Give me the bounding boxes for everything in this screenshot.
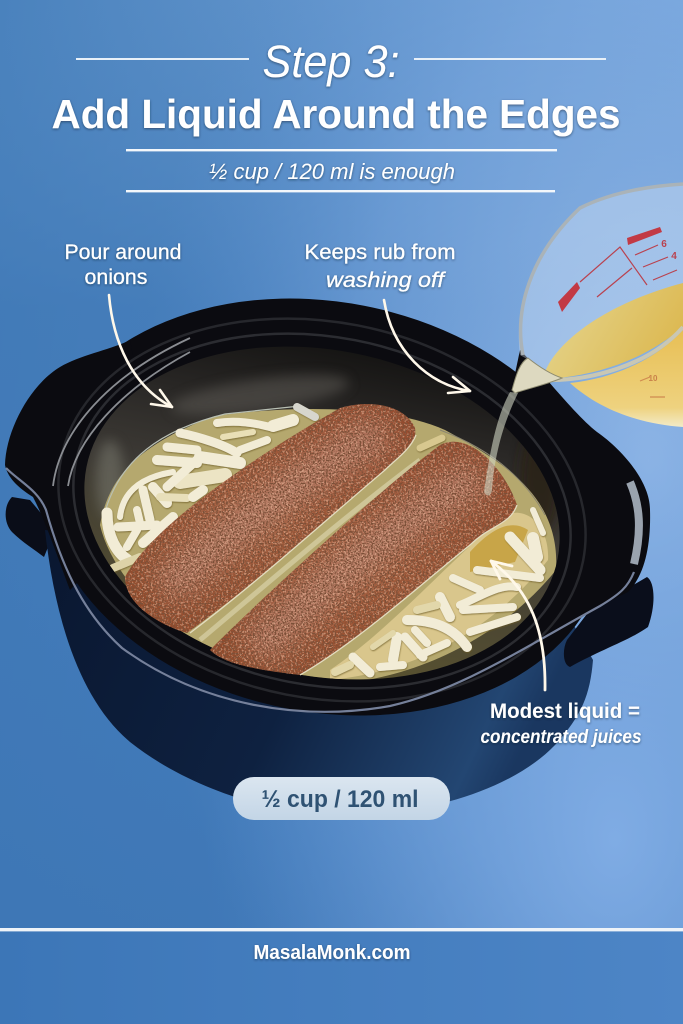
footer <box>0 928 683 1024</box>
pork loin 2 <box>205 435 520 680</box>
callout: pour around onions: onions <box>84 266 148 289</box>
10 oz tag <box>627 227 662 245</box>
cup numerals <box>649 239 677 383</box>
cooker rim <box>5 251 650 763</box>
arrow: pour around onions <box>109 295 172 407</box>
measuring cup with broth <box>484 183 683 496</box>
subtitle: ½ cup / 120 ml is enough <box>209 159 455 184</box>
heading <box>52 36 620 184</box>
step label: Step 3: <box>262 36 400 87</box>
liquid and onions <box>100 406 556 684</box>
onions right <box>335 438 543 673</box>
amount pill <box>233 777 450 820</box>
amount pill: ½ cup / 120 ml <box>262 786 418 813</box>
1 cup tag <box>558 282 580 312</box>
callout: modest liquid: Modest liquid = <box>490 700 640 723</box>
slow cooker <box>5 298 654 802</box>
glass <box>519 183 683 378</box>
footer: MasalaMonk.com <box>254 942 410 964</box>
loin edge lines <box>190 435 517 675</box>
arrow: keeps rub from washing off <box>384 300 470 393</box>
callout: keeps rub from washing off: Keeps rub from <box>304 241 456 264</box>
arrow: modest liquid <box>491 561 545 690</box>
callout: pour around onions <box>64 241 182 289</box>
cup numerals: 10 <box>649 374 658 383</box>
pork loin 1 <box>120 400 420 640</box>
cooker right lower lug <box>564 577 654 667</box>
broth lower <box>570 330 683 427</box>
cup numerals: 6 <box>661 239 667 250</box>
callout: keeps rub from washing off <box>304 241 456 292</box>
cooker interior <box>55 307 589 719</box>
broth stream <box>484 392 518 496</box>
spout <box>512 358 562 393</box>
broth <box>545 283 683 378</box>
cup numerals: 4 <box>671 251 677 262</box>
liquid between loins <box>200 460 420 640</box>
rim highlights <box>6 275 639 745</box>
cooker body <box>45 530 593 816</box>
cooker back left lug <box>6 497 55 557</box>
interior reflections <box>96 367 560 535</box>
callout: pour around onions: Pour around <box>64 241 182 264</box>
callout: modest liquid: concentrated juices <box>480 727 642 748</box>
callout: modest liquid <box>480 700 642 748</box>
cup markings <box>558 227 677 397</box>
callout: keeps rub from washing off: washing off <box>326 269 446 292</box>
title: Add Liquid Around the Edges <box>52 91 620 137</box>
onions left <box>107 407 315 568</box>
glass rim <box>521 184 683 355</box>
